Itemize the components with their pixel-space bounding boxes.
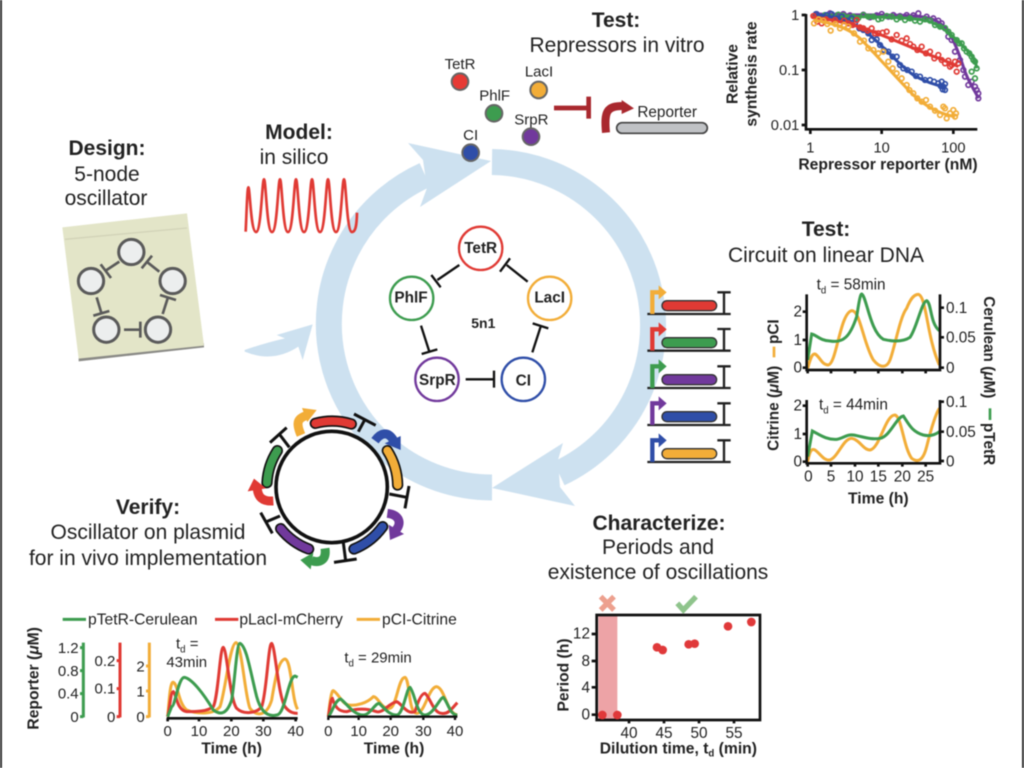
y tick labels: 0.1 <box>94 681 115 698</box>
icon: repressor dots <box>452 73 547 161</box>
dilution time labels: t <box>344 649 349 666</box>
inhibition edges <box>421 258 548 388</box>
tick labels <box>573 626 743 742</box>
dilution time labels: = 29min <box>354 649 412 666</box>
tick labels: 0.1 <box>946 300 967 317</box>
repressor labels: TetR <box>445 56 476 73</box>
y tick labels: 1.2 <box>58 640 79 657</box>
dilution time labels: = 58min <box>826 276 886 293</box>
reporter gene: Reporter <box>637 104 697 121</box>
x tick labels: 40 <box>447 723 463 740</box>
top panel axes <box>803 294 944 373</box>
repressor labels: PhlF <box>479 87 510 104</box>
heading: test repressors: Repressors in vitro <box>529 34 705 57</box>
data series <box>812 13 978 118</box>
construct 2 <box>647 322 731 351</box>
x tick labels <box>163 723 463 740</box>
left plot traces <box>168 643 298 717</box>
top panel traces <box>808 294 939 368</box>
heading: design <box>65 137 147 210</box>
y axis title: Period (h) <box>555 638 572 712</box>
dilution time labels: d <box>349 658 354 669</box>
heading: verify: Verify: <box>116 496 180 519</box>
network nodes <box>390 227 571 401</box>
x tick labels: 0 <box>163 723 172 740</box>
tick labels: 2 <box>793 398 802 415</box>
heading: test circuit: Circuit on linear DNA <box>728 244 924 267</box>
y tick labels: 0 <box>70 709 79 726</box>
tick labels: 4 <box>581 679 590 696</box>
x axis title: Repressor reporter (nM) <box>798 156 978 173</box>
tick labels: 0.05 <box>946 424 976 441</box>
chart: period versus dilution time <box>555 597 760 760</box>
heading: test repressors: Test: <box>592 9 640 32</box>
reporter gene <box>617 104 707 133</box>
right axis title: pTetR <box>980 423 997 465</box>
gene arcs outline <box>267 421 398 549</box>
x axis title: Dilution time, t <box>600 740 708 757</box>
panel: repressors and reporter <box>445 56 707 161</box>
node labels: LacI <box>534 290 565 307</box>
x tick labels: 20 <box>382 723 399 740</box>
entry arrow from design into cycle <box>245 324 313 360</box>
x tick labels: 10 <box>191 723 207 740</box>
tick labels: 0 <box>946 360 955 377</box>
tick labels: 45 <box>655 725 673 742</box>
icon: note paper with five-node sketch <box>62 213 204 361</box>
y tick labels: 0.8 <box>58 663 79 680</box>
heading: design: Design: <box>68 137 146 160</box>
tick labels: 5 <box>827 469 835 486</box>
repressor labels: CI <box>463 127 478 144</box>
icon: promoter arrow <box>605 100 634 133</box>
y tick labels <box>58 640 145 726</box>
x axis title: Time (h) <box>848 490 909 507</box>
tick labels: 1 <box>793 426 802 443</box>
construct 5 <box>647 433 731 462</box>
icon: check <box>677 597 696 610</box>
y tick labels: 0 <box>136 709 145 726</box>
heading: model: Model: <box>265 121 333 144</box>
repressor labels: LacI <box>525 64 553 81</box>
node labels <box>394 240 565 390</box>
dilution time labels: d <box>180 645 186 656</box>
left axis title: Citrine (μM) <box>766 366 783 451</box>
legend <box>63 612 457 629</box>
cycle arrow: design to test loop <box>329 143 653 506</box>
axis tick labels: 10 <box>874 141 890 157</box>
tick labels: 55 <box>725 725 743 742</box>
heading: verify: Oscillator on plasmid <box>51 521 245 544</box>
left axis title: pCI <box>766 319 783 344</box>
icon: repression bar <box>554 97 589 119</box>
promoter arrows <box>248 408 404 569</box>
plasmid backbone <box>276 431 387 543</box>
y axis title: Relative <box>724 44 741 104</box>
y axis title <box>724 21 761 127</box>
tick labels: 0 <box>581 707 590 724</box>
chart: linear DNA time courses <box>766 276 997 507</box>
x tick labels: 30 <box>255 723 272 740</box>
y tick labels: 0 <box>107 709 115 726</box>
tick labels: 50 <box>690 725 708 742</box>
heading: test circuit <box>728 218 924 267</box>
diagram: oscillator plasmid <box>248 408 409 569</box>
heading: design: oscillator <box>65 187 147 210</box>
tick labels: 20 <box>894 469 911 486</box>
heading: test circuit: Test: <box>802 218 850 241</box>
dilution time labels: d <box>823 406 829 417</box>
node labels: PhlF <box>394 290 428 307</box>
tick labels: 0.05 <box>946 330 976 347</box>
construct 1 <box>647 285 731 314</box>
axes <box>802 14 977 134</box>
tick labels: 8 <box>581 653 590 670</box>
x tick labels: 20 <box>223 723 240 740</box>
dilution time labels: t <box>817 276 821 293</box>
node labels: CI <box>516 373 531 390</box>
axis tick labels <box>771 8 966 157</box>
legend: pCI-Citrine <box>382 612 457 629</box>
tick labels <box>793 300 976 486</box>
node labels: SrpR <box>419 372 456 389</box>
x axis title: d <box>708 749 714 760</box>
right axis title <box>980 296 997 465</box>
right plot traces <box>328 677 457 717</box>
data points <box>598 618 756 719</box>
right plot axis <box>328 717 457 720</box>
panel: linear DNA constructs <box>647 285 731 462</box>
plot frame <box>592 615 760 723</box>
heading: model <box>260 121 333 169</box>
y tick labels: 1 <box>136 683 145 700</box>
construct 4 <box>647 396 731 425</box>
tick labels: 0.1 <box>946 394 967 411</box>
legend: pLacI-mCherry <box>239 612 343 629</box>
dilution time labels <box>166 636 412 671</box>
x axis titles: Time (h) <box>201 740 262 757</box>
x axis title: (min) <box>714 740 757 757</box>
y axis title: Reporter (μM) <box>25 627 42 730</box>
chart: plasmid reporter time courses <box>25 612 463 757</box>
axis tick labels: 1 <box>806 141 814 157</box>
node labels: TetR <box>464 240 497 257</box>
icon: cross <box>601 597 614 610</box>
tick labels: 0 <box>793 360 802 377</box>
tick labels: 15 <box>870 469 887 486</box>
y axes <box>80 643 149 717</box>
tick labels: 0 <box>804 469 813 486</box>
heading: verify: for in vivo implementation <box>29 547 267 570</box>
x axis titles: Time (h) <box>364 740 424 757</box>
axis tick labels: 100 <box>941 141 966 157</box>
x tick labels: 30 <box>415 723 432 740</box>
heading: characterize: existence of oscillations <box>548 561 768 584</box>
tick labels: 40 <box>620 725 638 742</box>
x tick labels: 40 <box>287 723 304 740</box>
chart: synthesis rate versus repressor <box>724 8 978 173</box>
dilution time labels: t <box>819 397 823 414</box>
legend: pTetR-Cerulean <box>88 612 198 629</box>
y tick labels: 0.4 <box>58 686 79 703</box>
tick labels: 12 <box>573 626 590 643</box>
dilution time labels: d <box>821 285 826 296</box>
no-oscillation shaded band <box>598 616 617 719</box>
tick labels: 1 <box>793 332 802 349</box>
dilution time labels: 43min <box>166 654 207 671</box>
gene arcs colour <box>267 421 398 549</box>
tick labels: 2 <box>793 304 802 321</box>
heading: characterize: Characterize: <box>592 512 726 535</box>
heading: characterize <box>548 512 768 584</box>
repressor labels <box>445 56 553 144</box>
y tick labels: 2 <box>136 658 145 675</box>
heading: design: 5-node <box>74 163 140 186</box>
repressor labels: SrpR <box>514 112 549 129</box>
construct 3 <box>647 359 731 388</box>
axis tick labels: 0.01 <box>771 118 799 134</box>
tick labels: 25 <box>917 469 934 486</box>
bottom panel axes <box>803 400 944 467</box>
x axis titles <box>201 740 424 757</box>
dilution time labels <box>817 276 888 417</box>
chart: in silico oscillation trace <box>246 179 357 232</box>
heading: model: in silico <box>260 146 328 169</box>
tick labels: 10 <box>846 469 864 486</box>
axis tick labels: 0.1 <box>779 63 799 79</box>
tick labels: 0 <box>793 454 802 471</box>
y tick labels: 0.2 <box>94 653 115 670</box>
left plot axis <box>167 718 298 721</box>
bottom panel traces <box>808 408 939 462</box>
terminators <box>261 414 409 562</box>
dilution time labels: = 44min <box>829 397 888 414</box>
heading: characterize: Periods and <box>602 536 714 559</box>
x tick labels: 0 <box>324 723 333 740</box>
diagram: 5n1 repressor network <box>390 227 571 401</box>
heading: verify <box>29 496 267 570</box>
node labels: 5n1 <box>471 315 496 331</box>
right axis title: Cerulean ( μ M) <box>980 296 997 398</box>
axis tick labels: 1 <box>791 8 799 24</box>
heading: test repressors <box>529 9 705 57</box>
dilution time labels: = <box>186 636 199 653</box>
x tick labels: 10 <box>350 723 367 740</box>
y axis title: synthesis rate <box>744 21 761 127</box>
dilution time labels: t <box>176 636 180 653</box>
left axis title <box>766 319 783 451</box>
tick labels: 0 <box>946 453 955 470</box>
